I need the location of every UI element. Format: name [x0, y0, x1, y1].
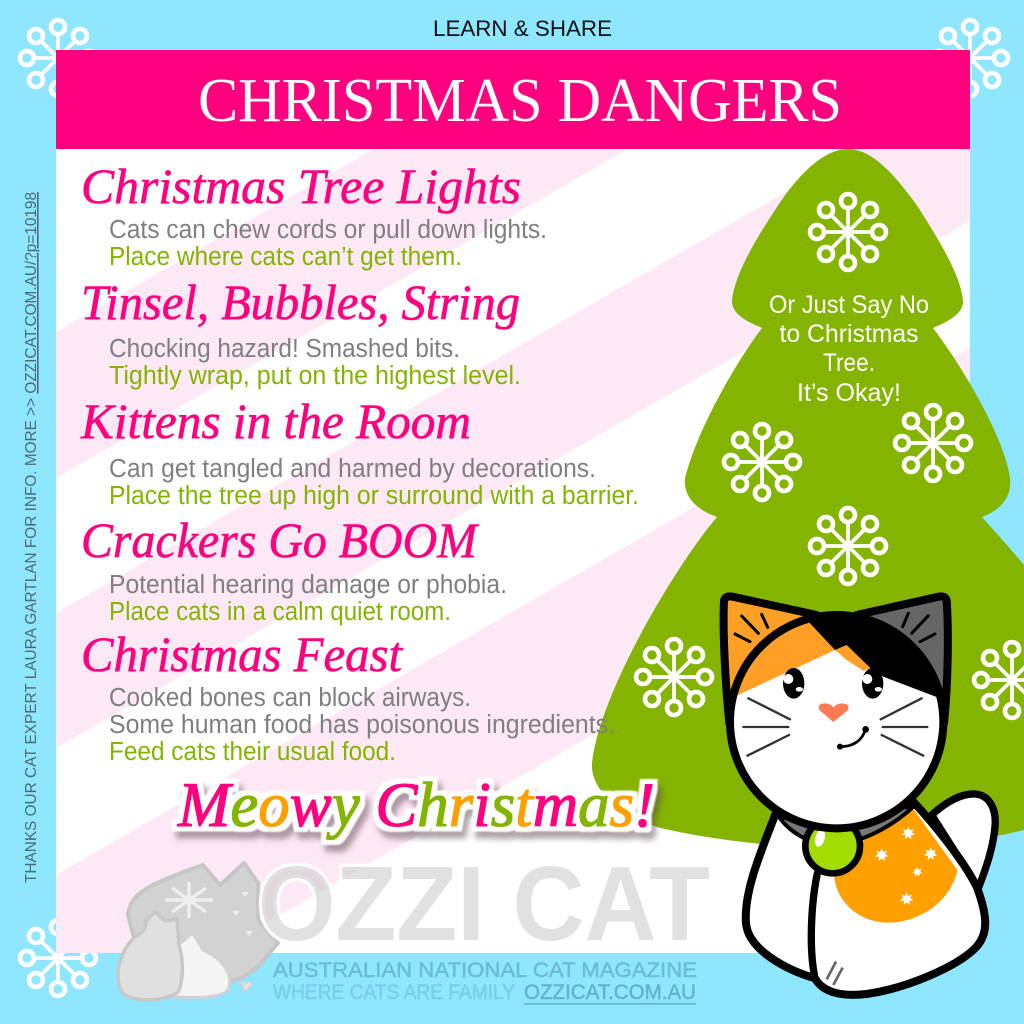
top label: LEARN & SHARE	[433, 16, 612, 41]
section: crackers go boom: Potential hearing damage or phobia.	[109, 571, 507, 599]
title banner	[56, 50, 970, 149]
cat tail	[932, 794, 995, 888]
cat nose	[819, 703, 849, 722]
christmas tree	[592, 149, 1024, 851]
cat left eye	[783, 668, 804, 699]
cat mouth	[837, 726, 869, 750]
section: christmas tree lights: Christmas Tree Lights	[81, 158, 521, 214]
section: kittens in the room: Place the tree up high or surround with a barrier.	[109, 482, 639, 510]
logo: tagline: AUSTRALIAN NATIONAL CAT MAGAZINE	[273, 959, 697, 982]
cat collar	[780, 807, 913, 839]
panel: striped content background	[56, 149, 970, 953]
logo: wordmark: OZZI CAT	[258, 845, 710, 963]
section: christmas feast: Feed cats their usual food.	[109, 738, 396, 766]
section: kittens in the room	[80, 393, 639, 510]
section: christmas tree lights	[81, 158, 547, 271]
cat front leg	[811, 873, 817, 978]
cat right ear	[857, 596, 948, 723]
logo: tagline: OZZICAT.COM.AU	[524, 981, 696, 1004]
section: christmas tree lights: Cats can chew cords or pull down lights.	[109, 216, 547, 244]
section: crackers go boom	[81, 512, 507, 626]
cat paw lines	[827, 962, 843, 985]
section: christmas feast: Christmas Feast	[81, 626, 403, 682]
meowy christmas greeting: Meowy Christmas!	[177, 770, 655, 840]
calico cat mascot	[720, 596, 995, 995]
section: crackers go boom: Crackers Go BOOM	[81, 512, 479, 568]
section: christmas feast: Cooked bones can block airways.	[109, 684, 471, 712]
logo: australia map with cats	[118, 863, 278, 1000]
section: tinsel, bubbles, string: Tinsel, Bubbles, String	[81, 274, 520, 330]
cat body	[746, 802, 985, 995]
section: tinsel, bubbles, string: Chocking hazard! Smashed bits.	[109, 335, 460, 363]
tree message: Tree.	[823, 349, 875, 377]
tree message: to Christmas	[780, 320, 918, 348]
section: kittens in the room: Can get tangled and harmed by decorations.	[109, 455, 596, 483]
tree message	[769, 291, 929, 407]
section: tinsel, bubbles, string	[81, 274, 521, 390]
cat bell	[805, 819, 860, 873]
vertical credit text: THANKS OUR CAT EXPERT LAURA GARTLAN FOR INFO. MORE >> OZZICAT.COM.AU/?p=10198	[23, 192, 40, 883]
section: christmas feast: Some human food has poisonous ingredients.	[109, 711, 615, 739]
section: kittens in the room: Kittens in the Room	[80, 393, 471, 449]
cat patch stars	[875, 827, 937, 905]
section: christmas feast	[81, 626, 615, 766]
cat head	[720, 600, 953, 828]
section: crackers go boom: Place cats in a calm quiet room.	[109, 598, 451, 626]
tree message: It’s Okay!	[797, 379, 901, 407]
section: tinsel, bubbles, string: Tightly wrap, put on the highest level.	[109, 362, 521, 390]
tree message: Or Just Say No	[769, 291, 929, 319]
section: christmas tree lights: Place where cats can’t get them.	[109, 243, 462, 271]
cat right eye	[862, 668, 883, 699]
cat left ear	[724, 596, 817, 723]
cat back patch	[834, 807, 957, 923]
cat ear lines	[735, 613, 935, 642]
logo: ozzi cat watermark	[118, 845, 710, 1005]
cat whiskers	[743, 698, 927, 756]
logo: tagline	[273, 959, 697, 1005]
title banner: CHRISTMAS DANGERS	[198, 67, 842, 135]
logo: tagline: WHERE CATS ARE FAMILY	[273, 981, 515, 1004]
